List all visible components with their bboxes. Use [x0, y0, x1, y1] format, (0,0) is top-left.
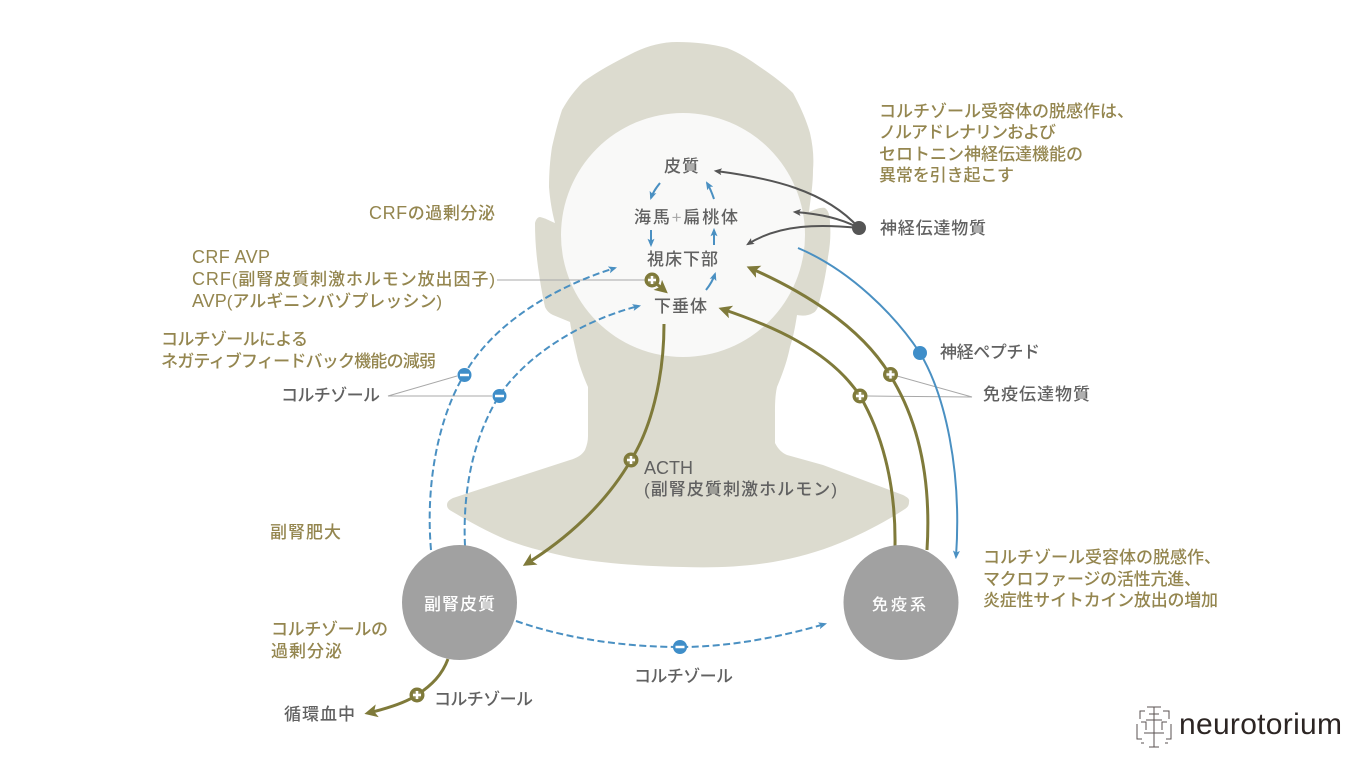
minus marker: cortisol inner — [492, 389, 506, 403]
note: receptor desensitization top: ノルアドレナリンおよび — [879, 123, 1056, 142]
label: ACTH: ACTH — [644, 458, 693, 478]
arrow: cortisol feedback outer — [430, 268, 615, 550]
plus marker: immune outer — [884, 368, 896, 380]
label: pituitary: 下垂体 — [654, 297, 707, 316]
note: immune effects: マクロファージの活性亢進、 — [983, 570, 1201, 589]
head silhouette — [447, 42, 909, 567]
note: receptor desensitization top: 異常を引き起こす — [879, 166, 1014, 185]
arrow: neuropeptide to immune system — [798, 248, 957, 557]
label: hypothalamus: 視床下部 — [647, 250, 718, 269]
note: CRF AVP: AVP(アルギニンバゾプレッシン) — [192, 291, 442, 311]
logo wordmark: neurotorium — [1179, 708, 1342, 741]
brain area circle — [561, 113, 805, 357]
label: cortex: 皮質 — [664, 157, 699, 176]
arrow: immune system to hypothalamus — [750, 268, 928, 550]
note: weakened negative feedback: ネガティブフィードバック機能の減弱 — [161, 351, 436, 371]
minus marker: cortisol bottom — [673, 640, 687, 654]
node: adrenal cortex: 副腎皮質 — [424, 595, 495, 614]
plus marker: circulation — [411, 689, 423, 701]
leader lines — [388, 280, 972, 397]
label: hippocampus and amygdala: 海馬+扁桃体 — [634, 208, 738, 227]
note: receptor desensitization top: セロトニン神経伝達機能の — [879, 145, 1083, 164]
note: immune effects: コルチゾール受容体の脱感作、 — [983, 548, 1221, 567]
node: neurotransmitter dot — [852, 221, 866, 235]
plus marker: ACTH — [625, 454, 637, 466]
note: receptor desensitization top — [879, 102, 1134, 185]
node: adrenal cortex — [402, 545, 517, 660]
note: CRF AVP: CRF(副腎皮質刺激ホルモン放出因子) — [192, 269, 495, 289]
note: weakened negative feedback: コルチゾールによる — [161, 330, 308, 349]
node: immune system — [844, 545, 958, 660]
label: neuropeptide: 神経ペプチド — [940, 343, 1040, 362]
label: ACTH: (副腎皮質刺激ホルモン) — [644, 480, 837, 499]
note: cortisol oversecretion: 過剰分泌 — [271, 642, 342, 661]
label: cortisol bottom: コルチゾール — [634, 667, 733, 686]
arrow: adrenal cortex to circulation — [368, 659, 448, 713]
node: immune system: 免疫系 — [872, 595, 926, 614]
plus marker: CRF — [646, 274, 658, 286]
logo — [1137, 707, 1342, 747]
node: neuropeptide dot — [913, 346, 927, 360]
arrow: cortisol feedback inner — [465, 306, 639, 546]
note: receptor desensitization top: コルチゾール受容体の脱感作は、 — [879, 102, 1134, 121]
arrows: neurotransmitter — [716, 171, 859, 244]
minus marker: cortisol outer — [458, 368, 472, 382]
label: neurotransmitter: 神経伝達物質 — [880, 219, 986, 238]
arrow: ACTH pathway — [526, 324, 664, 564]
plus marker: immune inner — [854, 390, 866, 402]
arrows: brain circuit — [651, 183, 715, 290]
note: CRF AVP: CRF AVP — [192, 247, 270, 267]
label: cortisol circulation: コルチゾール — [434, 690, 533, 709]
arrow: CRF to pituitary — [652, 280, 665, 291]
arrow: immune system to pituitary — [722, 309, 895, 546]
note: cortisol oversecretion — [271, 620, 388, 661]
label: cortisol left: コルチゾール — [281, 386, 380, 405]
icon: neural tree — [1137, 707, 1171, 747]
note: adrenal hypertrophy: 副腎肥大 — [270, 523, 341, 542]
note: immune effects: 炎症性サイトカイン放出の増加 — [983, 591, 1218, 610]
note: cortisol oversecretion: コルチゾールの — [271, 620, 388, 639]
arrow: cortisol to immune system — [516, 621, 825, 647]
note: weakened negative feedback — [161, 330, 436, 371]
label: circulating blood: 循環血中 — [284, 705, 355, 724]
label: immune transmitter: 免疫伝達物質 — [983, 385, 1090, 404]
note: immune effects — [983, 548, 1221, 610]
note: CRF AVP — [192, 247, 495, 311]
note: CRF oversecretion: CRFの過剰分泌 — [369, 203, 495, 223]
label: ACTH — [644, 458, 837, 499]
